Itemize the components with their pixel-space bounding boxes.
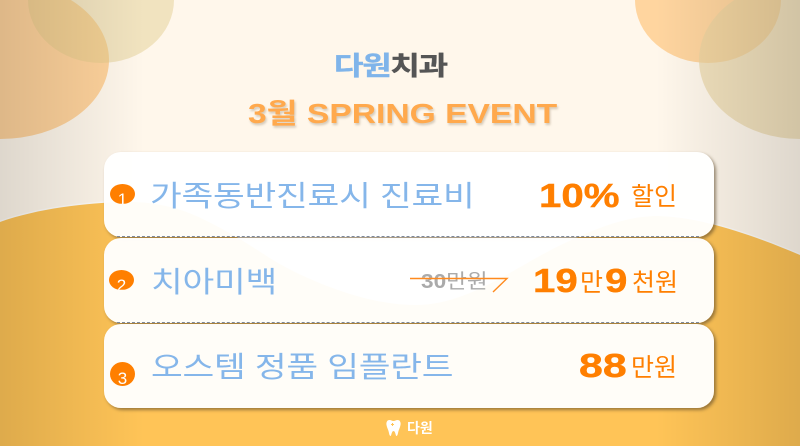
unit: discount: 할인 xyxy=(631,183,677,211)
label: family treatment: 가족동반진료시 진료비 xyxy=(150,181,474,213)
number badge 2 xyxy=(109,270,134,290)
unit: man won: 만원 xyxy=(631,354,677,382)
footer brand text: 다원 xyxy=(407,420,433,436)
footer logo xyxy=(386,420,433,436)
price: 19: 19 xyxy=(533,262,578,299)
panel: implant xyxy=(104,324,714,408)
price: 10 percent: 10% xyxy=(539,177,620,214)
unit: man: 만 xyxy=(580,269,603,297)
number badge 1 xyxy=(110,184,135,204)
price: 88: 88 xyxy=(579,347,627,384)
icon: tooth xyxy=(386,420,401,436)
panel: family discount xyxy=(104,152,714,237)
divider line 1 xyxy=(117,236,699,237)
unit: cheon won: 천원 xyxy=(632,269,678,297)
strike line xyxy=(410,278,509,292)
label: genuine Osstem implant: 오스템 정품 임플란트 xyxy=(151,352,453,384)
label: whitening: 치아미백 xyxy=(151,267,277,299)
title: clinic name: 다원치과 xyxy=(334,51,447,81)
price: 9: 9 xyxy=(605,262,627,299)
old price struck through: 30만원 xyxy=(421,271,488,293)
number badge 3 xyxy=(110,362,135,386)
divider line 2 xyxy=(117,322,699,323)
panel: whitening xyxy=(104,238,714,323)
heading: 3월 SPRING EVENT: 3월 SPRING EVENT xyxy=(248,98,557,129)
